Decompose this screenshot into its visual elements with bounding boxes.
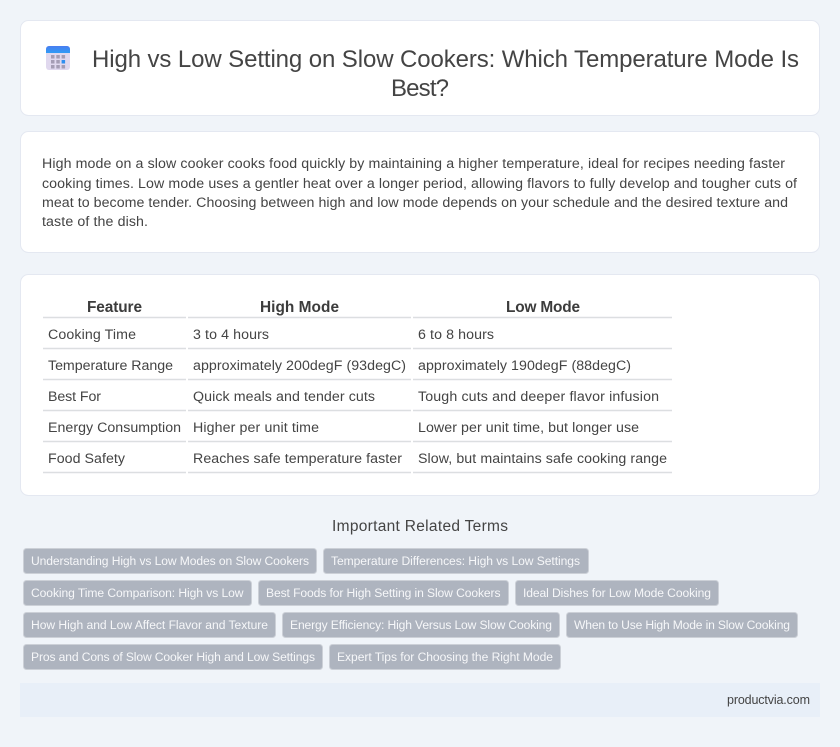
table row: food safety: Food Safety (48, 451, 126, 467)
table row: best for: Tough cuts and deeper flavor infusion (418, 389, 659, 405)
related terms chips (24, 548, 798, 670)
table row: temperature range: approximately 200degF (93degC) (193, 358, 406, 374)
table row: energy consumption: Lower per unit time, but longer use (418, 420, 639, 436)
table row: cooking time: 6 to 8 hours (418, 327, 494, 343)
chip (24, 644, 322, 670)
chip: Pros and Cons of Slow Cooker High and Low Settings (31, 650, 315, 664)
chip: Understanding High vs Low Modes on Slow Cookers (31, 554, 309, 568)
table row: food safety (48, 451, 667, 467)
chip (24, 548, 316, 574)
title: Best? (391, 75, 449, 102)
table row: temperature range: approximately 190degF (88degC) (418, 358, 631, 374)
chip (566, 612, 798, 638)
table row: cooking time (48, 327, 494, 343)
table header: Feature (87, 299, 142, 316)
footer source: productvia.com (727, 693, 810, 707)
chip: Cooking Time Comparison: High vs Low (31, 586, 244, 600)
text block: introduction: cooking times. Low mode uses a gentler heat over a longer period, allowing flavors to fully develop and tougher cuts of (42, 176, 797, 192)
text block: introduction (42, 156, 797, 230)
table header (87, 299, 580, 316)
footer bar (20, 683, 820, 717)
chip (324, 548, 588, 574)
chip (330, 644, 560, 670)
icon: calendar (46, 46, 70, 70)
text block: introduction: High mode on a slow cooker cooks food quickly by maintaining a higher temperature, ideal for recipes needing faster (42, 156, 785, 172)
chip (516, 580, 718, 606)
title (92, 46, 799, 102)
panel: introduction (20, 132, 820, 252)
title: High vs Low Setting on Slow Cookers: Which Temperature Mode Is (92, 46, 799, 73)
table row: temperature range (48, 358, 631, 374)
table row: best for (48, 389, 659, 405)
chip: When to Use High Mode in Slow Cooking (574, 618, 790, 632)
chip: Best Foods for High Setting in Slow Cookers (266, 586, 500, 600)
table row: energy consumption: Higher per unit time (193, 420, 319, 436)
table row: best for: Quick meals and tender cuts (193, 389, 375, 405)
chip: Ideal Dishes for Low Mode Cooking (523, 586, 711, 600)
chip: Temperature Differences: High vs Low Settings (331, 554, 580, 568)
chip (282, 612, 560, 638)
chip (24, 580, 252, 606)
heading: important related terms: Important Related Terms (332, 518, 508, 535)
chip: How High and Low Affect Flavor and Texture (31, 618, 268, 632)
table row: energy consumption: Energy Consumption (48, 420, 181, 436)
table row: temperature range: Temperature Range (48, 358, 173, 374)
text block: introduction: taste of the dish. (42, 214, 148, 230)
table header: High Mode (260, 299, 339, 316)
text block: introduction: meat to become tender. Choosing between high and low mode depends on your schedule and the desired texture and (42, 195, 788, 211)
chip: Expert Tips for Choosing the Right Mode (337, 650, 553, 664)
table row: food safety: Slow, but maintains safe cooking range (418, 451, 667, 467)
panel: title card (20, 20, 820, 116)
table row: cooking time: 3 to 4 hours (193, 327, 269, 343)
chip (258, 580, 508, 606)
table row: cooking time: Cooking Time (48, 327, 136, 343)
table row: best for: Best For (48, 389, 101, 405)
table row: food safety: Reaches safe temperature faster (193, 451, 402, 467)
chip (24, 612, 276, 638)
table row: energy consumption (48, 420, 639, 436)
chip: Energy Efficiency: High Versus Low Slow Cooking (290, 618, 552, 632)
panel: comparison table (20, 274, 820, 496)
table header: Low Mode (506, 299, 580, 316)
